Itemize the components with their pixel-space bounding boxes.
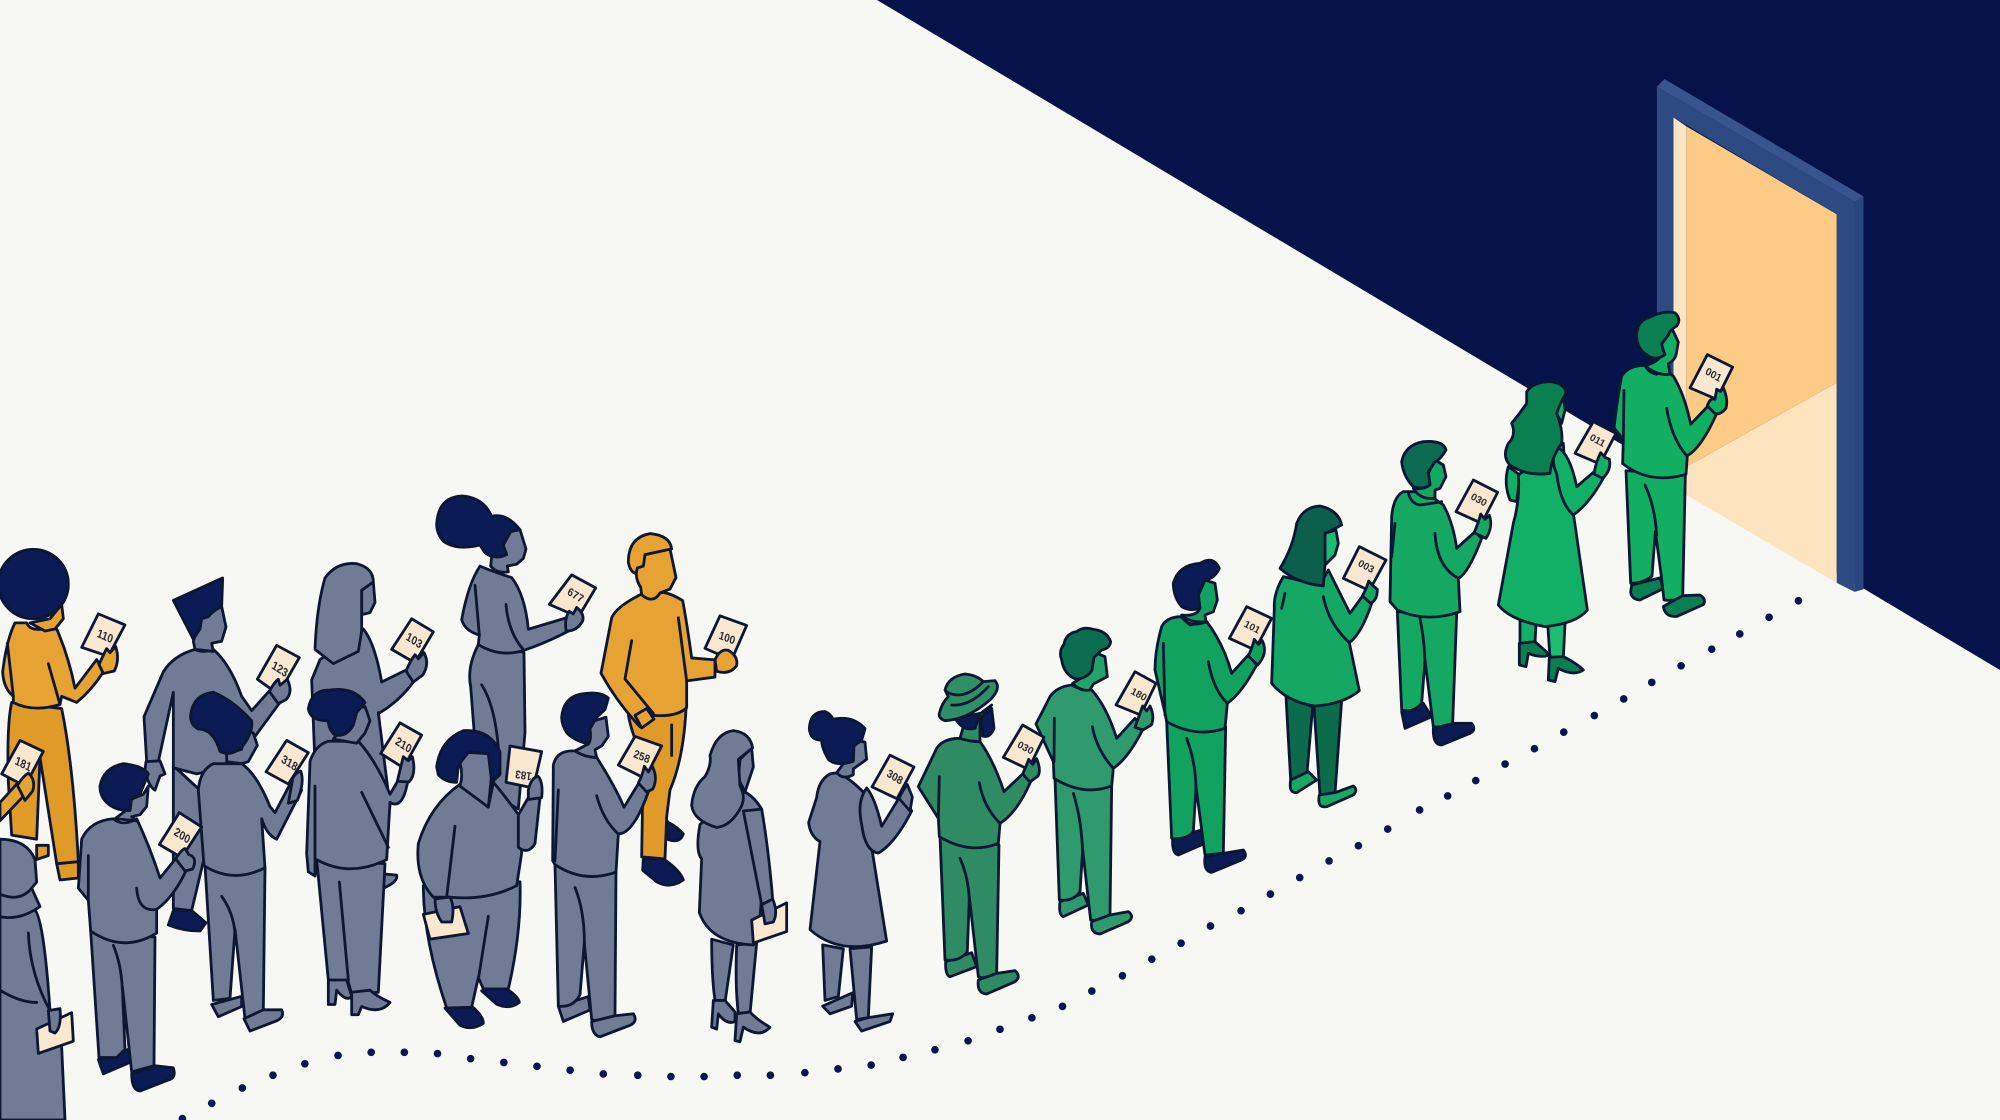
ticket 030: 030 <box>1015 740 1035 757</box>
door light: left strip <box>1673 117 1686 500</box>
door frame right side <box>1855 196 1864 592</box>
ticket 101: 101 <box>1242 619 1262 637</box>
ticket 200: 200 <box>172 826 192 847</box>
person: tall woman with large bun at the top <box>437 496 596 809</box>
ticket 258: 258 <box>632 748 651 766</box>
floor light patch <box>1686 383 1837 583</box>
ticket 103: 103 <box>404 631 424 652</box>
person: woman with long hair holding ticket low <box>692 731 787 1042</box>
ticket 123: 123 <box>270 659 289 680</box>
person: woman with bun in gray dress <box>809 712 914 1031</box>
person: man with hood collar, third in line <box>1390 441 1498 745</box>
ticket 100: 100 <box>717 629 737 647</box>
ticket 308 <box>872 755 914 799</box>
ticket 001: 001 <box>1703 366 1723 385</box>
doorway with glowing light <box>1657 79 1864 592</box>
ticket 030 <box>1456 480 1498 523</box>
ticket 030 <box>1003 725 1044 769</box>
ticket 318: 318 <box>279 753 299 774</box>
ticket 210 <box>381 723 422 768</box>
ticket 011 <box>1575 422 1616 464</box>
ticket 200 <box>159 813 202 858</box>
person: woman with afro in orange <box>0 549 125 880</box>
door light: main opening <box>1686 126 1837 467</box>
door frame top side <box>1657 79 1864 202</box>
person: man in orange, out of line <box>601 534 747 885</box>
ticket 003 <box>1343 547 1386 591</box>
dotted path on floor <box>179 597 1802 1120</box>
ticket 101 <box>1229 607 1272 650</box>
ticket 123 <box>257 645 299 694</box>
person: woman with curly bun and T-shirt <box>191 692 308 1031</box>
person: man with hat and beard <box>918 674 1044 994</box>
ticket 110: 110 <box>96 627 114 646</box>
person: woman in green dress, second in line <box>1498 382 1616 682</box>
ticket 011: 011 <box>1587 432 1607 450</box>
ticket 180 <box>1116 672 1156 715</box>
ticket 318 <box>266 740 308 784</box>
ticket 100 <box>705 616 747 660</box>
ticket held low <box>37 1013 73 1053</box>
dark navy wall <box>877 0 2000 670</box>
ticket 180: 180 <box>1129 686 1149 704</box>
person: man holding ticket 200 <box>78 764 202 1091</box>
ticket 110 <box>82 614 125 656</box>
ticket 210: 210 <box>393 735 413 756</box>
person: woman with dark hair and dark trousers <box>1272 506 1386 807</box>
ticket 001 <box>1690 355 1733 399</box>
person: woman with hijab at lower left <box>0 839 73 1120</box>
person: heavy-set man in gray <box>418 730 542 1028</box>
ticket 103 <box>392 619 433 663</box>
person: man with navy hair in green <box>1155 560 1272 872</box>
ticket held up 183 <box>506 746 542 788</box>
ticket held low <box>752 903 787 943</box>
ticket 258 <box>618 736 662 778</box>
person: woman with navy bun and heels <box>307 689 422 1015</box>
ticket 677: 677 <box>565 586 585 606</box>
door frame front <box>1657 87 1855 592</box>
person: man at the door, first in line <box>1614 312 1733 616</box>
ticket 030: 030 <box>1469 492 1489 509</box>
person: long haired woman behind, gray <box>312 563 433 888</box>
ticket 181: 181 <box>13 755 33 775</box>
ticket 308: 308 <box>885 767 905 788</box>
orange arm holding ticket at far left <box>0 740 43 821</box>
ticket held up 183: 183 <box>515 767 533 782</box>
ticket 677 <box>549 575 596 617</box>
person: man with navy hair holding ticket 258 <box>553 693 662 1037</box>
person: man with curly hair in teal green <box>1036 628 1156 934</box>
ticket 003: 003 <box>1356 558 1376 576</box>
person: man with flat top hair <box>144 578 299 931</box>
ticket held low <box>423 907 468 939</box>
